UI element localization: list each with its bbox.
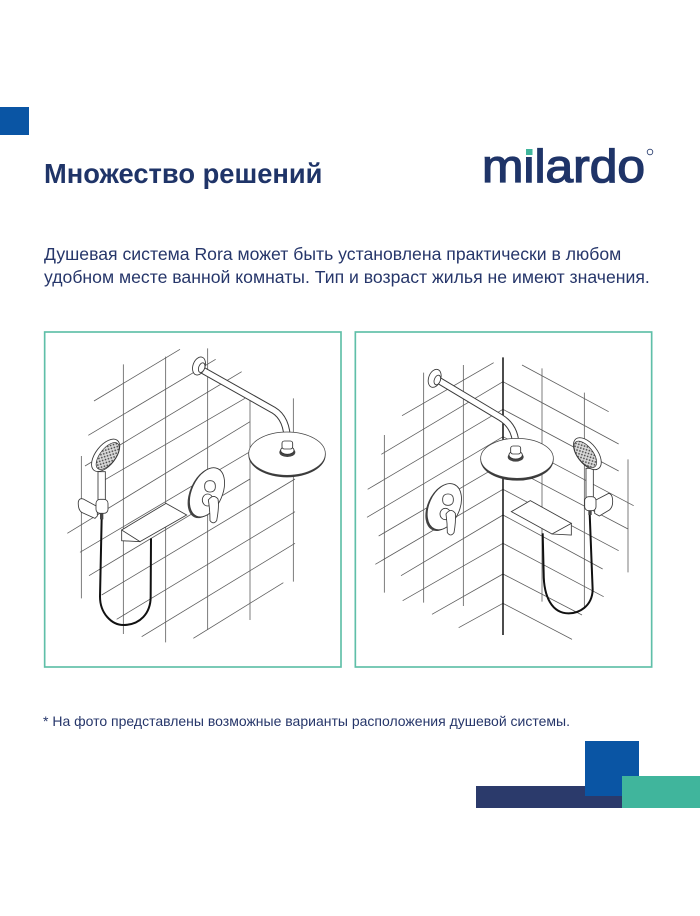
title: Множество решений: [44, 158, 322, 189]
icon: mixer: [418, 478, 468, 536]
icon: shower arm: [190, 355, 287, 442]
icon: mixer: [180, 462, 232, 524]
icon: rain shower head: [480, 438, 554, 481]
icon: hand shower: [568, 433, 613, 516]
intro text: удобном месте ванной комнаты. Тип и возраст жилья не имеют значения.: [44, 267, 650, 287]
panel: wall installation: [44, 331, 342, 668]
intro text: [44, 244, 650, 287]
footnote: * На фото представлены возможные варианты расположения душевой системы.: [43, 713, 570, 729]
corner square: top left: [0, 107, 29, 135]
icon: rain shower head: [248, 432, 326, 477]
logo: milardo: milardo: [482, 140, 645, 192]
icon: hose: [543, 513, 593, 613]
corner line: [501, 357, 505, 635]
icon: hose: [100, 518, 151, 625]
icon: shower arm: [426, 368, 516, 447]
icon: hand shower: [78, 434, 125, 519]
icon: shelf: [122, 503, 187, 542]
decorative blocks: bottom right: [476, 741, 700, 808]
panel: corner installation: [354, 331, 652, 668]
icon: shelf: [511, 501, 571, 535]
intro text: Душевая система Rora может быть установлена практически в любом: [44, 244, 621, 264]
